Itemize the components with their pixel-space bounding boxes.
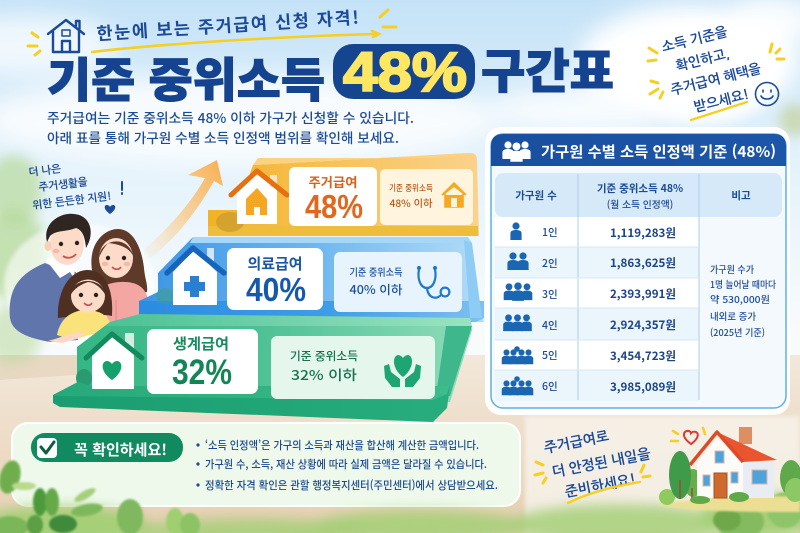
step: housing 48% [208,153,479,236]
callout: family message [28,163,122,214]
bullet list: 가구원 수, 소득, 재산 상황에 따라 실제 금액은 달라질 수 있습니다. [205,456,487,472]
badge [31,433,183,462]
callout: bottom right [535,429,652,503]
daughter [48,270,112,343]
yellow sparks [28,10,396,55]
icon: hands with heart [384,355,421,387]
illustration: house [658,427,800,512]
card: 주거급여 [289,167,377,226]
row 5 [502,346,676,364]
row 6 [502,376,676,395]
title: 구간표 [481,33,614,102]
row 3: 3인 [542,287,558,302]
card: 주거급여: 주거급여 [308,172,358,191]
callout: bottom right: 준비하세요! [564,472,637,500]
title: 기준 중위소득 [47,42,325,111]
base platform [53,382,450,422]
icon: smile [756,82,778,106]
column headers: 가구원 수 [515,188,557,203]
callout: top right: 확인하고, [674,46,731,74]
title house icon [48,20,84,52]
card: 48% 이하 [380,169,473,225]
card: 32% 이하 [271,336,435,399]
step: medical 40% [139,237,484,322]
card: 주거급여: 48% [305,188,363,225]
table header bar [491,134,786,166]
card: 의료급여: 40% [246,271,306,308]
card: 생계급여: 32% [172,353,232,392]
note column [710,262,776,339]
card: 생계급여 [147,329,258,394]
icon: green house [86,333,142,389]
column headers [495,173,782,217]
bullet list: ‘소득 인정액’은 가구의 소득과 재산을 합산해 계산한 금액입니다. [205,437,479,453]
yellow underline arrow [92,31,379,52]
intro text [47,107,414,147]
note column: 1명 늘어날 때마다 [710,277,776,291]
row 1: 1인 [542,225,558,240]
card: 의료급여: 의료급여 [248,253,302,274]
card: 의료급여 [227,248,323,310]
table header bar: 가구원 수별 소득 인정액 기준 (48%) [541,141,776,162]
row 2: 2인 [542,256,558,271]
growth arrow [138,160,223,262]
step: livelihood 32% [53,314,472,422]
row 5: 5인 [542,348,558,363]
row 4: 4인 [542,318,558,333]
icon: heart [684,431,698,444]
card: 32% 이하: 기준 중위소득 [290,348,358,364]
note column: 가구원 수가 [710,262,754,276]
row 5: 3,454,723원 [610,348,676,364]
pill 48%: 48% [343,40,467,103]
row 3 [504,282,676,302]
icon: stethoscope [418,267,449,298]
title [47,33,614,111]
mother [91,229,148,335]
callout: bottom right: 더 안정된 내일을 [551,446,652,480]
icon: blue house [167,248,224,305]
bullet list [196,437,498,493]
row 6: 6인 [542,379,558,394]
card: 40% 이하 [334,252,462,312]
callout: top right: 주거급여 혜택을 [669,61,763,98]
row 4: 2,924,357원 [610,317,676,333]
intro text: 주거급여는 기준 중위소득 48% 이하 가구가 신청할 수 있습니다. [47,107,414,127]
callout: family message: 더 나은 [28,163,62,178]
row 1: 1,119,283원 [610,225,676,241]
column headers: 비고 [731,188,751,203]
father [10,214,91,342]
row 6: 3,985,089원 [610,379,676,395]
callout: family message: 위한 든든한 지원! [32,190,112,211]
panel: checklist [12,423,520,506]
row 3: 2,393,991원 [610,286,676,302]
card: 48% 이하: 48% 이하 [390,195,432,210]
row 2 [507,252,676,271]
headline tag: 한눈에 보는 주거급여 신청 자격! [96,4,361,46]
card: 48% 이하: 기준 중위소득 [389,182,433,194]
note column: 약 530,000원 [710,292,770,306]
intro text: 아래 표를 통해 가구원 수별 소득 인정액 범위를 확인해 보세요. [47,127,399,147]
callout: top right: 받으세요! [692,87,751,115]
row 4 [503,314,676,333]
icon: orange house [231,171,287,224]
row 1 [510,222,676,241]
card: 40% 이하: 40% 이하 [350,281,402,298]
icon: people [502,141,531,162]
illustration: family [4,214,156,347]
card: 32% 이하: 32% 이하 [291,364,357,384]
card: 40% 이하: 기준 중위소득 [350,264,402,279]
callout: top right: 소득 기준을 [660,24,729,55]
trees [659,451,800,505]
callout: top right [624,20,784,124]
badge: 꼭 확인하세요! [74,439,167,460]
column headers: 기준 중위소득 48% [597,181,683,196]
callout: bottom right: 주거급여로 [543,429,610,456]
note column: 내외로 증가 [710,309,756,323]
bullet list: 정확한 자격 확인은 관할 행정복지센터(주민센터)에서 상담받으세요. [205,477,498,493]
bottom greenery [0,416,800,533]
note column: (2025년 기준) [710,325,765,339]
callout: family message: 주거생활을 [38,176,88,193]
column headers: (월 소득 인정액) [607,197,673,211]
red roof [690,432,777,465]
panel: income table [485,127,790,415]
card: 생계급여: 생계급여 [173,333,229,354]
row 2: 1,863,625원 [610,255,676,271]
